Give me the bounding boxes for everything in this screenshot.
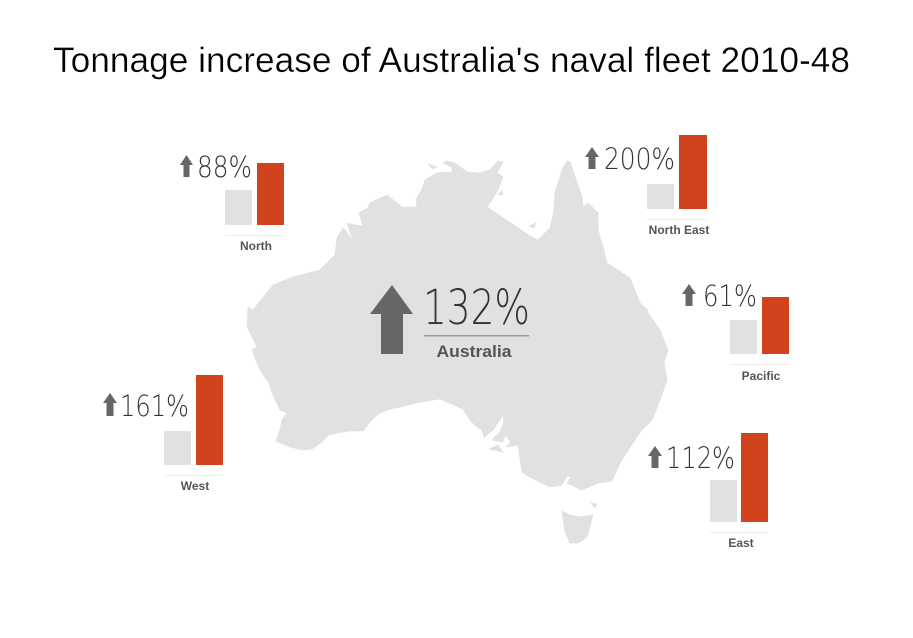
2048 bar [196,375,223,465]
2048 bar [741,433,768,522]
panel: North [180,150,284,253]
label: Pacific [742,369,781,383]
title: Tonnage increase of Australia's naval fleet 2010-48 [53,40,850,80]
label: Australia: Australia [436,342,512,361]
2010 bar [225,190,252,225]
panel: North East [585,135,709,237]
icon: large up arrow [370,285,413,354]
2010 bar [730,320,757,354]
2010 bar [164,431,191,465]
icon: arrow [180,155,193,177]
label: North [240,239,272,253]
icon: arrow [682,284,696,306]
map of Australia [247,161,668,543]
value: 61% [703,279,757,313]
value: 112% [666,441,735,475]
2048 bar [762,297,789,354]
label: West [181,479,209,493]
icon: arrow [103,393,117,416]
icon: arrow [585,147,599,169]
value: 200% [604,142,675,176]
2048 bar [679,135,707,209]
panel: Pacific [682,279,789,383]
island: Tasmania [562,511,593,543]
islands [428,164,597,508]
value: 88% [197,150,252,184]
2010 bar [647,184,674,209]
2048 bar [257,163,284,225]
value: 161% [120,389,189,423]
value 132%: 132% [423,280,530,336]
icon: arrow [648,446,662,468]
central figure: Australia 132% [370,280,530,361]
label: East [728,536,754,550]
divider [424,335,529,336]
label: North East [649,223,709,237]
panel: West [103,375,223,493]
panel: East [648,433,768,550]
2010 bar [710,480,737,522]
